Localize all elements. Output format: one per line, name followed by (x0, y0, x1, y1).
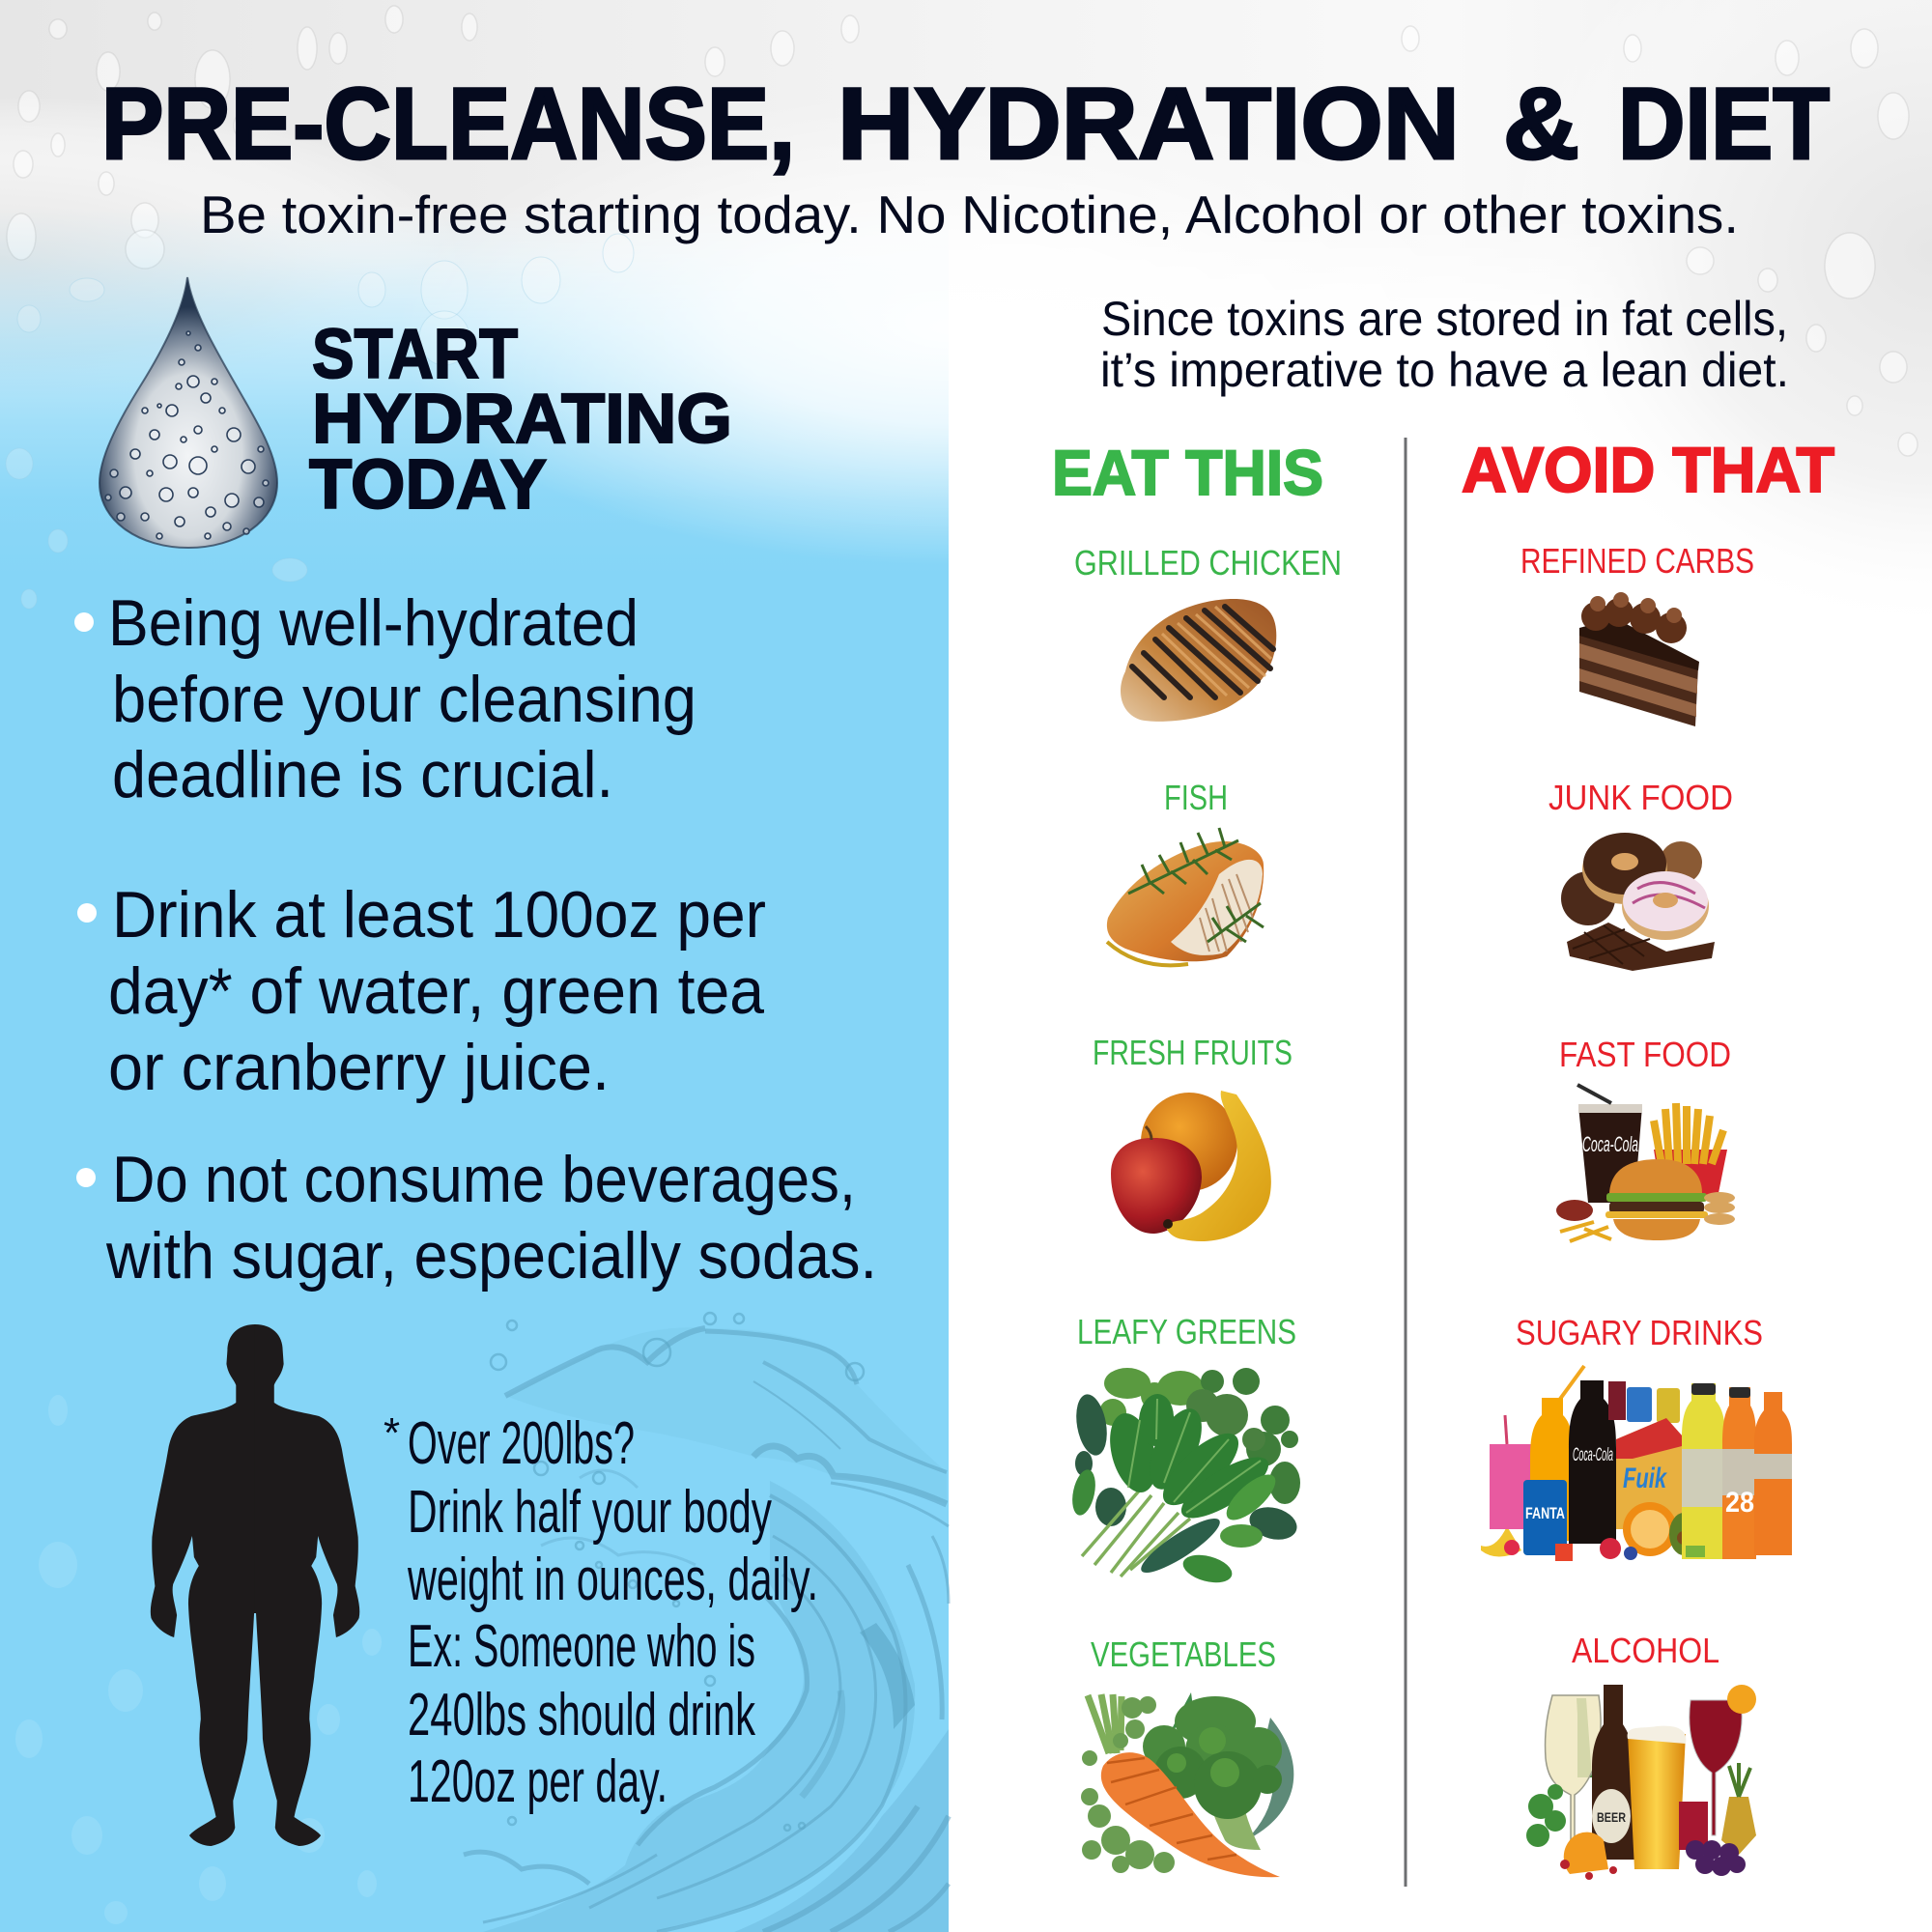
icon: sugary drinks: FANTA (1525, 1504, 1565, 1522)
label: vegetables: VEGETABLES (1091, 1634, 1276, 1674)
icon: body silhouette (151, 1324, 359, 1846)
title (101, 68, 1830, 181)
icon: sugary drinks (1481, 1366, 1792, 1561)
intro: lean diet: Since toxins are stored in fat cells, (1101, 292, 1788, 346)
panel: eat this (1052, 437, 1342, 1877)
intro: lean diet: it’s imperative to have a lean diet. (1100, 343, 1789, 397)
note: over 200lbs (384, 1409, 818, 1815)
heading: start hydrating today (309, 316, 732, 524)
panel: hydration (0, 92, 1499, 1932)
label: grilled chicken: GRILLED CHICKEN (1074, 543, 1342, 582)
icon: leafy greens (1068, 1368, 1300, 1587)
bullet: no sugar: with sugar, especially sodas. (105, 1219, 877, 1293)
label: fish: FISH (1164, 778, 1228, 817)
icon: sugary drinks: Fuik (1623, 1463, 1667, 1494)
note: over 200lbs: * (384, 1409, 400, 1457)
icon: alcohol: BEER (1597, 1809, 1626, 1825)
note: over 200lbs: Drink half your body (408, 1479, 772, 1546)
heading: start hydrating today: HYDRATING (312, 381, 732, 458)
icon: water drop (99, 277, 277, 548)
bullet: no sugar (76, 1143, 877, 1293)
panel: avoid that (1462, 434, 1834, 1880)
bullet: well-hydrated: Being well-hydrated (108, 586, 639, 660)
icon: grilled chicken (1121, 599, 1276, 722)
icon: alcohol (1526, 1685, 1756, 1880)
bullet: drink 100oz: day* of water, green tea (108, 954, 764, 1028)
bullet: well-hydrated: deadline is crucial. (112, 738, 613, 811)
note: over 200lbs: Over 200lbs? (408, 1410, 635, 1477)
icon: vegetables (1081, 1692, 1293, 1877)
bullet: well-hydrated (74, 586, 696, 811)
icon: sugary drinks: 28 (1725, 1487, 1754, 1519)
icon: refined carbs (1579, 592, 1699, 726)
title: PRE-CLEANSE, (101, 68, 795, 181)
bullet: drink 100oz: Drink at least 100oz per (112, 878, 766, 952)
bullet: no sugar: Do not consume beverages, (112, 1143, 856, 1216)
bullet: drink 100oz: or cranberry juice. (108, 1031, 610, 1104)
title: HYDRATION (838, 68, 1460, 181)
water splash wave (464, 1313, 949, 1932)
label: refined carbs: REFINED CARBS (1520, 541, 1754, 581)
heading: avoid that: AVOID THAT (1462, 434, 1834, 505)
icon: junk food (1561, 833, 1715, 971)
note: over 200lbs: 240lbs should drink (408, 1682, 756, 1748)
heading: start hydrating today: TODAY (309, 446, 547, 524)
label: leafy greens: LEAFY GREENS (1077, 1312, 1296, 1351)
panel background: blue gradient (0, 92, 1499, 1932)
title: & (1503, 68, 1579, 181)
icon: sugary drinks: Coca-Cola (1573, 1445, 1613, 1465)
note: over 200lbs: 120oz per day. (408, 1748, 668, 1815)
icon: fish (1107, 828, 1264, 965)
label: sugary drinks: SUGARY DRINKS (1516, 1313, 1763, 1352)
bullet: well-hydrated: before your cleansing (112, 663, 696, 736)
bullet: drink 100oz (77, 878, 766, 1104)
title: DIET (1618, 68, 1830, 181)
background: water droplets on grey (0, 0, 1932, 510)
intro: lean diet (1100, 292, 1789, 397)
label: fast food: FAST FOOD (1559, 1035, 1731, 1074)
column divider (1405, 438, 1406, 1887)
label: junk food: JUNK FOOD (1548, 778, 1733, 817)
label: fresh fruits: FRESH FRUITS (1093, 1033, 1293, 1072)
heading: eat this: EAT THIS (1052, 437, 1323, 508)
icon: fast food (1556, 1085, 1735, 1241)
subtitle: Be toxin-free starting today. No Nicotine, Alcohol or other toxins. (200, 185, 1739, 244)
label: alcohol: ALCOHOL (1572, 1631, 1719, 1670)
note: over 200lbs: weight in ounces, daily. (407, 1547, 818, 1613)
note: over 200lbs: Ex: Someone who is (408, 1613, 755, 1680)
icon: fresh fruits (1111, 1091, 1271, 1241)
heading: start hydrating today: START (312, 316, 518, 393)
icon: fast food: Coca-Cola (1582, 1132, 1638, 1156)
